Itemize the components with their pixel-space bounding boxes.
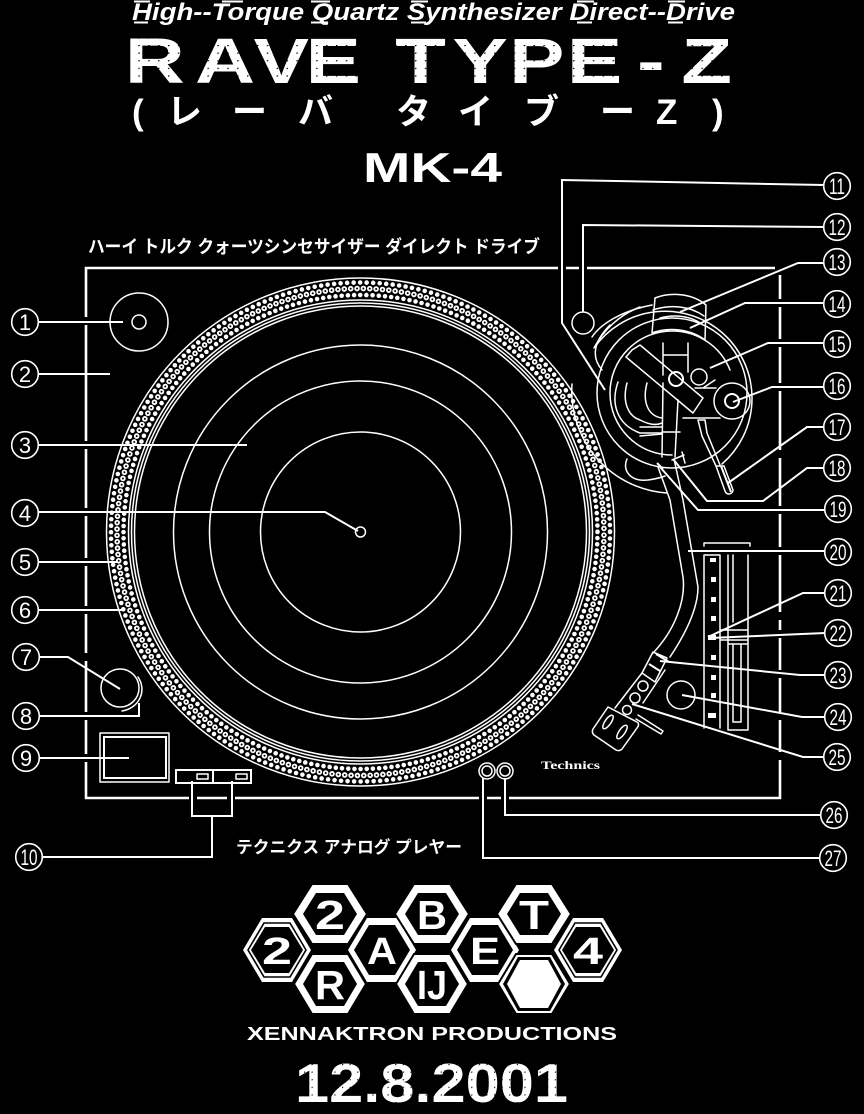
callout 18 bbox=[673, 455, 850, 501]
anti-skate lever bbox=[698, 420, 720, 466]
title: MK-4: MK-4 bbox=[363, 144, 503, 191]
callout 21: 21 bbox=[830, 581, 846, 606]
text: katakana brand line: テクニクス アナログ プレヤー bbox=[236, 837, 462, 857]
callout 14: 14 bbox=[828, 292, 846, 317]
callout 12: 12 bbox=[828, 215, 846, 240]
brand: Technics: Technics bbox=[541, 760, 601, 772]
date: 12.8.2001: 12.8.2001 bbox=[295, 1052, 568, 1114]
callout 13: 13 bbox=[828, 250, 846, 275]
callout 16 bbox=[733, 373, 850, 402]
title: RAVE TYPE-Z: RAVE TYPE-Z bbox=[0, 25, 732, 97]
counterweight bbox=[652, 294, 706, 340]
callout 24 bbox=[682, 695, 851, 730]
callout 22 bbox=[710, 620, 851, 646]
hexagon: bottom IJ bbox=[396, 954, 468, 1014]
callout 15 bbox=[710, 331, 850, 368]
callout 4: 4 bbox=[19, 501, 31, 526]
hexagon: top 2 bbox=[293, 884, 367, 944]
callout 15: 15 bbox=[828, 332, 846, 357]
hexagon: top B: B bbox=[417, 892, 447, 938]
hexagon: top T bbox=[497, 884, 571, 944]
callout 9: 9 bbox=[20, 746, 32, 771]
strobe dots bbox=[111, 282, 610, 782]
pivot and bar bbox=[626, 345, 703, 413]
callout 3 bbox=[12, 432, 247, 458]
callout 19: 19 bbox=[830, 497, 846, 522]
callout 8: 8 bbox=[20, 704, 32, 729]
start knob bbox=[101, 669, 142, 711]
hexagon: mid A: A bbox=[367, 931, 397, 973]
callout 8 bbox=[13, 703, 139, 729]
callout 7: 7 bbox=[20, 645, 32, 670]
hexagon: bottom R: R bbox=[315, 962, 345, 1008]
platter bbox=[106, 278, 614, 786]
hexagon: mid A bbox=[348, 918, 416, 982]
callout 6 bbox=[12, 597, 125, 623]
callout 11: 11 bbox=[829, 174, 845, 199]
callout 5 bbox=[12, 549, 118, 575]
hexagon: mid 4 bbox=[554, 918, 622, 982]
tonearm base bbox=[572, 294, 752, 494]
callout 7 bbox=[13, 644, 120, 689]
hexagon: mid E bbox=[451, 918, 519, 982]
callout 26 bbox=[505, 778, 847, 828]
hexagon: bottom IJ: IJ bbox=[417, 962, 447, 1008]
callout 11 bbox=[562, 173, 850, 390]
callout 4 bbox=[12, 500, 358, 531]
callout 10: 10 bbox=[20, 845, 38, 870]
callout 27 bbox=[483, 778, 846, 871]
callout 17: 17 bbox=[828, 415, 846, 440]
stylus light sockets bbox=[479, 763, 513, 779]
callout 9 bbox=[13, 745, 129, 771]
callout 2: 2 bbox=[19, 362, 31, 387]
callout 12 bbox=[572, 214, 850, 334]
callout 27: 27 bbox=[824, 846, 842, 871]
arm column bbox=[662, 383, 680, 457]
callout 23: 23 bbox=[830, 663, 846, 688]
hexagon: blank bbox=[498, 954, 570, 1014]
callout 20: 20 bbox=[830, 540, 846, 565]
speed buttons bbox=[176, 770, 251, 783]
callout 13 bbox=[680, 249, 850, 312]
turntable diagram bbox=[86, 268, 780, 798]
hexagon: top 2: 2 bbox=[315, 892, 345, 938]
callout 3: 3 bbox=[19, 433, 31, 458]
callout 21 bbox=[708, 580, 851, 637]
hexagon: mid E: E bbox=[470, 931, 500, 973]
callout 19 bbox=[660, 467, 851, 522]
callout 16: 16 bbox=[828, 374, 846, 399]
title: katakana reading: (レーバ タイブーZ) bbox=[0, 92, 724, 132]
callout 5: 5 bbox=[19, 550, 31, 575]
callout 6: 6 bbox=[19, 598, 31, 623]
callout 22: 22 bbox=[830, 621, 846, 646]
callout 23 bbox=[660, 661, 851, 688]
hexagon: mid 4: 4 bbox=[573, 931, 603, 973]
text: Xennaktron Productions: XENNAKTRON PRODUCTIONS bbox=[247, 1024, 617, 1044]
hexagon: top T: T bbox=[519, 892, 549, 938]
callout 20 bbox=[688, 539, 851, 565]
callout 1: 1 bbox=[19, 310, 31, 335]
power knob bbox=[110, 293, 168, 351]
callout 14 bbox=[690, 291, 850, 328]
callout 10 bbox=[16, 781, 232, 870]
callout 26: 26 bbox=[826, 803, 842, 828]
hexagon logo bbox=[243, 884, 622, 1014]
pitch slider bbox=[704, 543, 750, 730]
text: katakana subtitle: ハーイ トルク クォーツシンセサイザー ダイレクト ドライブ bbox=[88, 236, 540, 257]
callout 18: 18 bbox=[828, 456, 846, 481]
chassis outline bbox=[86, 268, 780, 798]
tonearm tube and headshell bbox=[592, 459, 698, 751]
callout 25: 25 bbox=[828, 745, 846, 770]
callout 25 bbox=[632, 704, 850, 770]
cue button bbox=[667, 681, 695, 709]
callout 24: 24 bbox=[830, 705, 846, 730]
hexagon: bottom R bbox=[294, 954, 366, 1014]
start-stop panel bbox=[100, 733, 169, 782]
callout 17 bbox=[728, 414, 850, 483]
hexagon: top B bbox=[395, 884, 469, 944]
callout 1 bbox=[12, 309, 123, 335]
hexagon: mid 2 bbox=[243, 918, 311, 982]
hexagon: mid 2: 2 bbox=[262, 931, 292, 973]
callout 2 bbox=[12, 361, 110, 387]
